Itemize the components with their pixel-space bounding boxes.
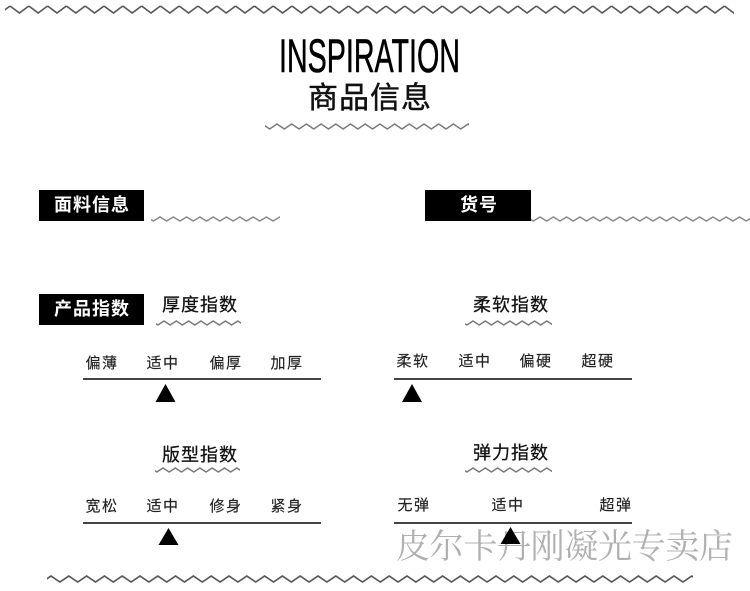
thickness scale labels (85, 355, 304, 372)
softness scale labels: 柔软 (396, 353, 430, 370)
elasticity heading zigzag (465, 465, 552, 475)
fit marker (158, 528, 178, 545)
softness heading: 柔软指数 (473, 295, 549, 315)
thickness scale labels: 加厚 (270, 355, 304, 372)
thickness marker (156, 384, 176, 402)
fit heading zigzag (155, 465, 240, 475)
title: INSPIRATION (279, 29, 460, 82)
item number zigzag (531, 214, 750, 224)
softness heading zigzag (465, 318, 552, 328)
softness scale labels (396, 353, 615, 370)
label: fabric info (39, 190, 144, 221)
softness scale labels: 偏硬 (519, 353, 553, 370)
panel: softness index (394, 295, 632, 402)
softness marker (402, 384, 422, 402)
fit scale labels: 宽松 (85, 498, 119, 515)
label: product indices (39, 294, 144, 325)
thickness scale labels: 偏厚 (209, 355, 243, 372)
title zigzag underline (265, 121, 469, 132)
elasticity scale labels: 适中 (491, 497, 525, 514)
panel: fit index (83, 445, 321, 545)
bottom zigzag border (47, 573, 693, 585)
softness scale labels: 超硬 (581, 353, 615, 370)
subtitle: 商品信息 (308, 82, 432, 115)
watermark: 皮尔卡丹刚凝光专卖店 (396, 519, 733, 568)
fabric zigzag (151, 214, 280, 224)
fit scale labels (85, 498, 304, 515)
thickness scale labels: 偏薄 (85, 355, 119, 372)
softness scale line (394, 378, 632, 380)
label: product indices: 产品指数 (54, 298, 130, 319)
elasticity scale labels: 超弹 (599, 497, 633, 514)
thickness scale labels: 适中 (146, 355, 180, 372)
top zigzag border (5, 3, 734, 16)
elasticity heading: 弹力指数 (473, 443, 549, 463)
label: item number: 货号 (460, 194, 498, 215)
fit scale labels: 修身 (209, 498, 243, 515)
panel: elasticity index (394, 443, 633, 544)
fit scale line (83, 522, 321, 524)
fit scale labels: 紧身 (270, 498, 304, 515)
thickness scale line (83, 378, 321, 380)
fit heading: 版型指数 (162, 445, 238, 465)
label: item number (425, 190, 531, 221)
fit scale labels: 适中 (146, 498, 180, 515)
thickness heading zigzag (156, 318, 241, 328)
elasticity scale labels (397, 497, 633, 514)
elasticity marker (500, 527, 520, 544)
elasticity scale labels: 无弹 (397, 497, 431, 514)
label: fabric info: 面料信息 (54, 194, 130, 215)
softness scale labels: 适中 (458, 353, 492, 370)
thickness heading: 厚度指数 (162, 295, 238, 315)
panel: thickness index (83, 295, 321, 402)
elasticity scale line (394, 522, 632, 524)
